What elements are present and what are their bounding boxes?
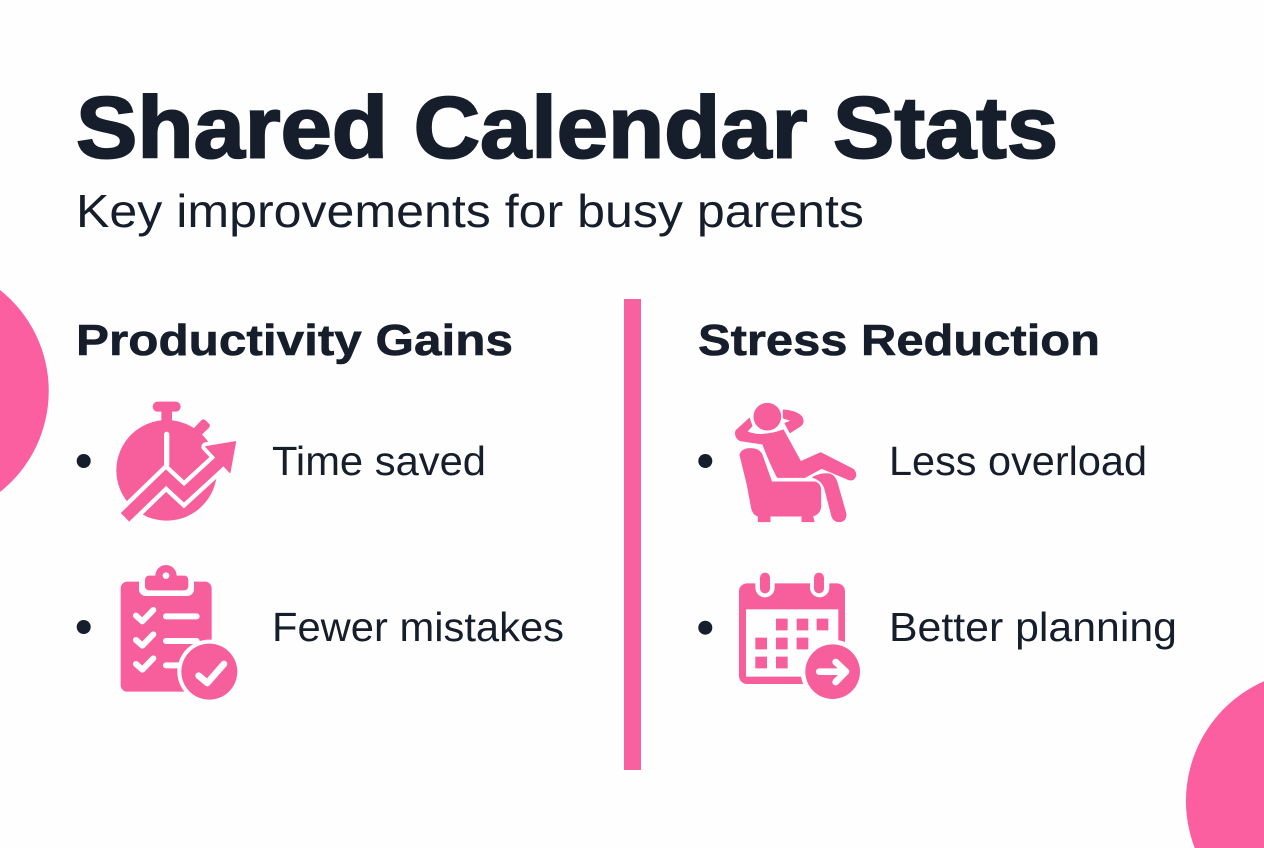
decorative circle: bottom right corner — [1186, 681, 1264, 848]
bullet — [698, 454, 712, 468]
bullet — [77, 620, 91, 634]
bullet — [698, 621, 712, 635]
icon: calendar with arrow — [739, 569, 865, 704]
icon: clipboard checklist — [121, 565, 241, 704]
list item: better planning — [698, 569, 1177, 704]
center divider — [624, 299, 641, 770]
label: time saved: Time saved — [272, 438, 486, 484]
panel: stress reduction — [698, 316, 1177, 704]
subtitle: Key improvements for busy parents — [76, 185, 864, 237]
list item: fewer mistakes — [77, 565, 564, 704]
label: fewer mistakes: Fewer mistakes — [272, 604, 564, 650]
heading: stress reduction: Stress Reduction — [698, 316, 1100, 365]
label: less overload: Less overload — [889, 438, 1147, 484]
icon: stopwatch with rising arrow — [116, 402, 236, 521]
list item: time saved — [77, 402, 486, 521]
bullet — [77, 454, 91, 468]
decorative circle: left edge — [0, 290, 49, 492]
list item: less overload — [698, 403, 1147, 522]
label: better planning: Better planning — [889, 604, 1177, 650]
icon: person relaxing in armchair — [735, 403, 856, 522]
panel: productivity gains — [76, 316, 564, 704]
heading: productivity gains: Productivity Gains — [76, 316, 513, 365]
title: Shared Calendar Stats — [76, 80, 1058, 176]
